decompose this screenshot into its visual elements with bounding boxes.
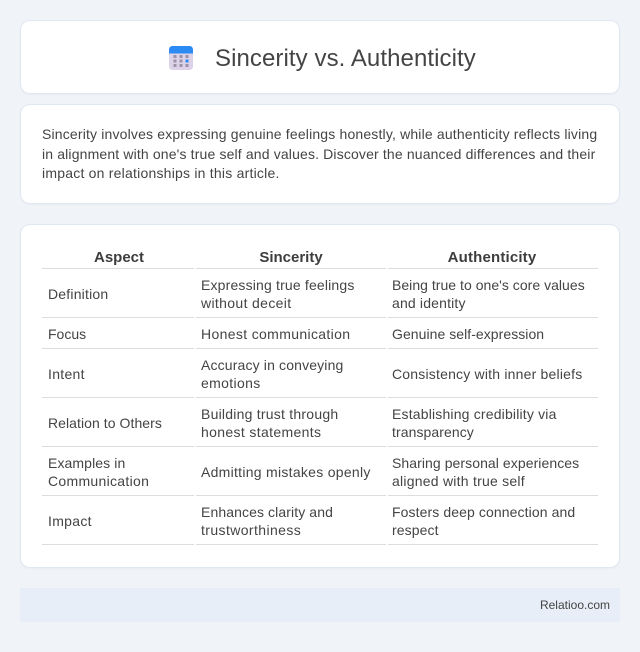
intro text: impact on relationships in this article.	[42, 165, 280, 181]
table header	[94, 249, 536, 266]
row: Examples in Communication	[42, 446, 598, 489]
row: Relation to Others: honest statements	[201, 424, 321, 440]
footer bar	[20, 588, 620, 622]
row: Definition: Definition	[48, 286, 108, 302]
row: Impact: Enhances clarity and	[201, 504, 333, 520]
row: Impact: Fosters deep connection and	[392, 504, 575, 520]
row: Impact: respect	[392, 522, 439, 538]
row: Definition: Being true to one's core values	[392, 277, 585, 293]
icon: calendar	[169, 46, 193, 70]
row: Relation to Others: Establishing credibility via	[392, 406, 557, 422]
row: Focus: Genuine self-expression	[392, 326, 544, 342]
row: Impact: Impact	[48, 513, 92, 529]
row: Focus: Focus	[48, 326, 86, 342]
intro text: Sincerity involves expressing genuine feelings honestly, while authenticity reflects living	[42, 126, 597, 142]
row: Focus: Honest communication	[201, 326, 350, 342]
row: Examples in Communication: aligned with true self	[392, 473, 525, 489]
row: Relation to Others: Relation to Others	[48, 415, 162, 431]
panel: comparison table	[20, 224, 620, 568]
intro text: in alignment with one's true self and values. Discover the nuanced differences and their	[42, 146, 595, 162]
column heading: Authenticity: Authenticity	[448, 249, 536, 266]
row: Examples in Communication: Examples in	[48, 455, 125, 471]
column heading: Sincerity: Sincerity	[259, 249, 323, 266]
row: Examples in Communication: Admitting mistakes openly	[201, 464, 371, 480]
row: Relation to Others	[42, 397, 598, 440]
panel: header	[20, 20, 620, 94]
column heading: Aspect: Aspect	[94, 249, 144, 266]
panel: introduction	[20, 104, 620, 204]
row: Definition: and identity	[392, 295, 466, 311]
row: Intent: Accuracy in conveying	[201, 357, 343, 373]
row: Intent: Consistency with inner beliefs	[392, 366, 582, 382]
row: Relation to Others: Building trust through	[201, 406, 338, 422]
row: Impact	[42, 495, 598, 545]
title: Sincerity vs. Authenticity	[215, 45, 476, 72]
row: Relation to Others: transparency	[392, 424, 474, 440]
row: Focus	[42, 317, 598, 342]
row: Examples in Communication: Sharing personal experiences	[392, 455, 579, 471]
row: Definition: Expressing true feelings	[201, 277, 354, 293]
row: Definition	[42, 268, 598, 311]
row: Examples in Communication: Communication	[48, 473, 149, 489]
row: Definition: without deceit	[201, 295, 292, 311]
intro text	[42, 126, 597, 181]
row: Intent	[42, 348, 598, 391]
row: Intent: emotions	[201, 375, 261, 391]
row: Impact: trustworthiness	[201, 522, 301, 538]
row: Intent: Intent	[48, 366, 85, 382]
footer credit: Relatioo.com	[540, 598, 610, 612]
